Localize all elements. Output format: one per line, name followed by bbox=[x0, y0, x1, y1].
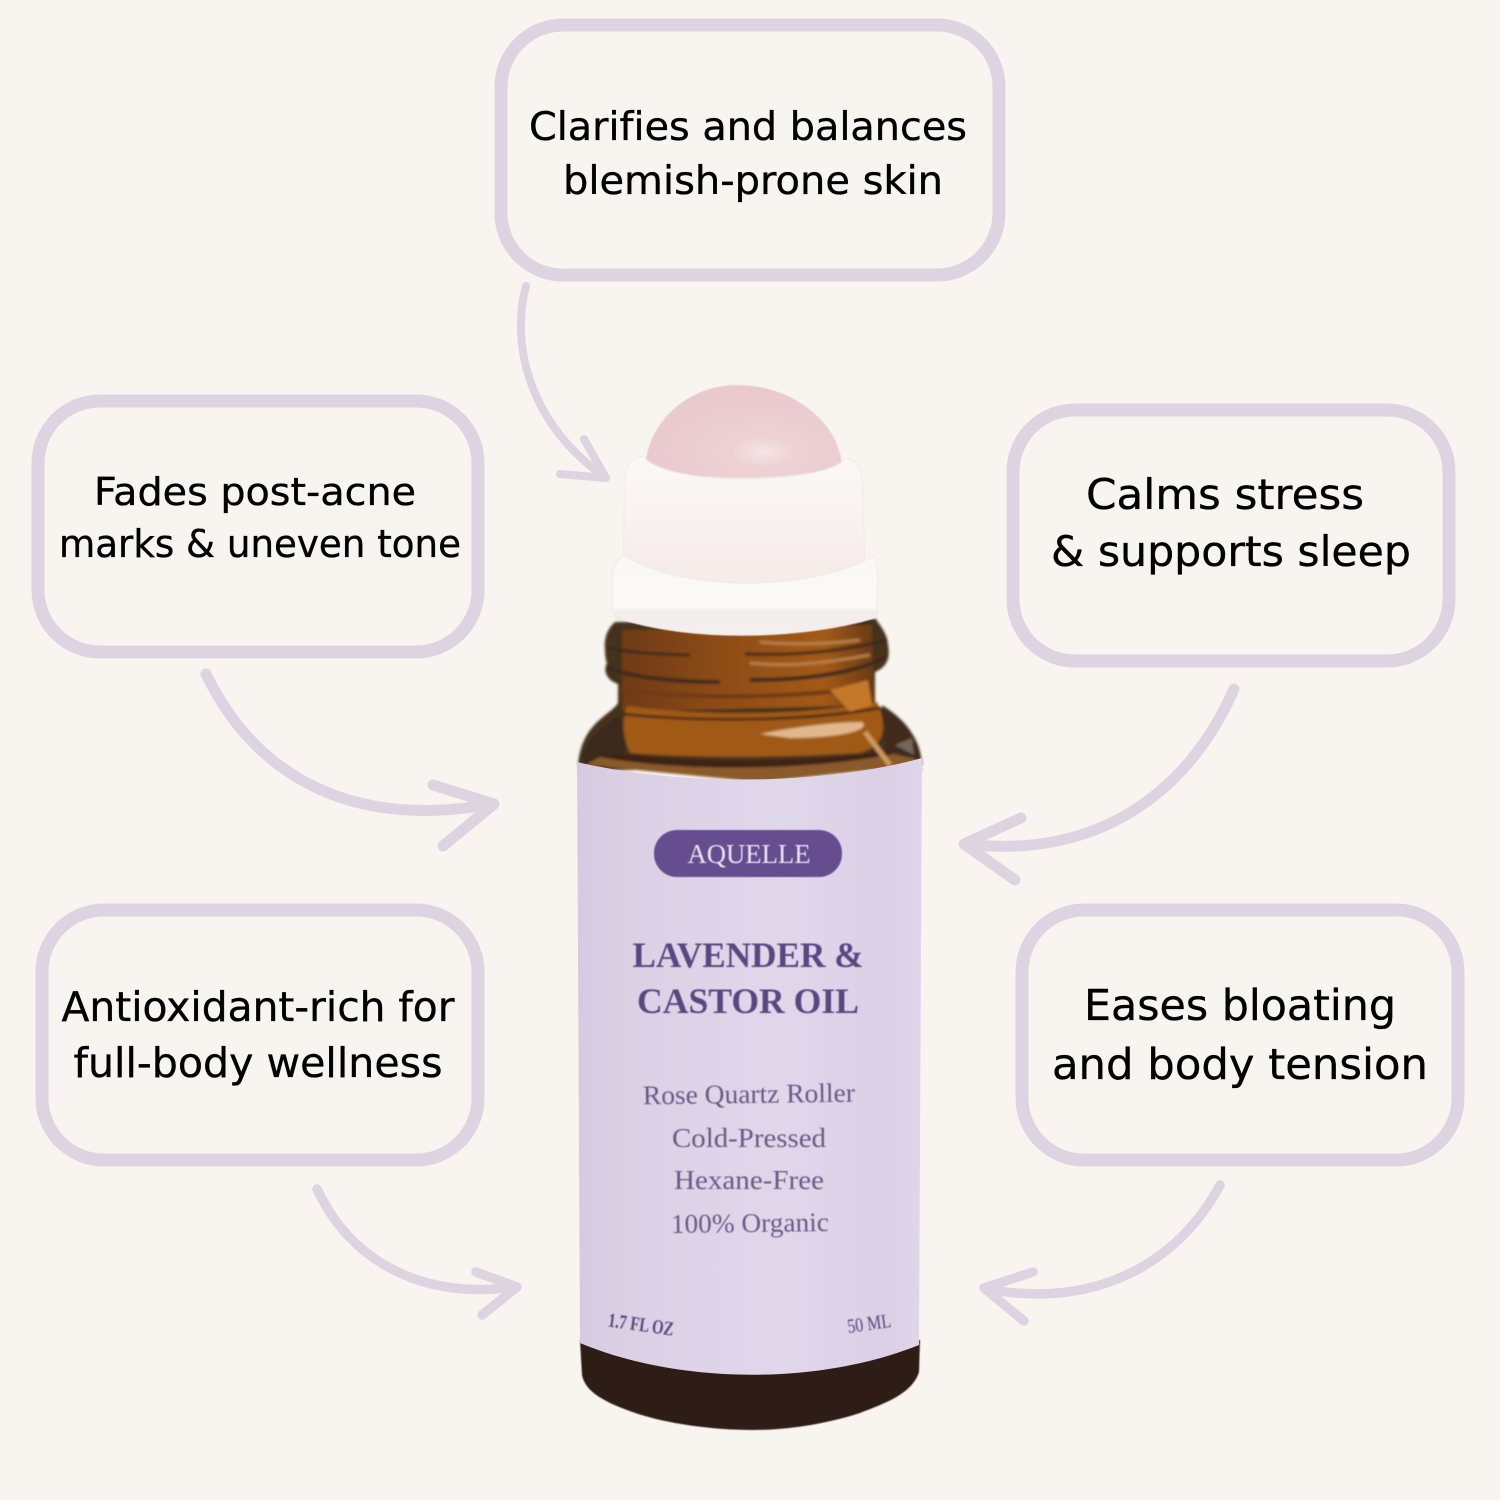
roller ring bbox=[612, 555, 878, 635]
glass neck and shoulders bbox=[578, 618, 922, 782]
label features: Cold-Pressed bbox=[672, 1123, 827, 1153]
callout: clarifies bbox=[501, 25, 999, 275]
brand badge: AQUELLE bbox=[688, 839, 810, 869]
brand badge bbox=[654, 830, 842, 877]
callout: eases: Eases bloating bbox=[1084, 981, 1396, 1031]
callout: calms bbox=[1013, 410, 1449, 661]
volume labels: 1.7 FL OZ bbox=[607, 1310, 675, 1341]
bottle base bbox=[580, 1340, 920, 1430]
label features: Hexane-Free bbox=[674, 1165, 824, 1195]
volume labels bbox=[607, 1310, 892, 1341]
callout: calms: Calms stress bbox=[1086, 470, 1364, 519]
callout: fades: Fades post-acne bbox=[94, 470, 416, 514]
arrow: lower left bbox=[317, 1189, 517, 1315]
label features: 100% Organic bbox=[671, 1207, 829, 1239]
arrow: lower right bbox=[984, 1185, 1220, 1321]
arrow: top bbox=[521, 286, 606, 478]
callout: antioxidant: Antioxidant-rich for bbox=[62, 983, 455, 1031]
arrow: upper left bbox=[206, 674, 494, 846]
callout: antioxidant: full-body wellness bbox=[74, 1039, 443, 1087]
label title: CASTOR OIL bbox=[637, 981, 859, 1021]
callout: antioxidant bbox=[42, 910, 478, 1160]
volume labels: 50 ML bbox=[846, 1310, 892, 1338]
label title bbox=[632, 935, 864, 1021]
arrows bbox=[206, 286, 1234, 1321]
callout: eases: and body tension bbox=[1052, 1040, 1428, 1090]
label bbox=[577, 758, 922, 1375]
callout: eases bbox=[1022, 910, 1458, 1160]
roller cap bbox=[623, 456, 865, 584]
label title: LAVENDER & bbox=[632, 935, 864, 975]
label features: Rose Quartz Roller bbox=[643, 1078, 855, 1110]
label features bbox=[643, 1078, 855, 1239]
arrow: upper right bbox=[964, 689, 1234, 880]
callout: clarifies: blemish-prone skin bbox=[563, 159, 943, 204]
roller ball bbox=[645, 385, 842, 478]
callout: fades bbox=[38, 401, 478, 652]
callout: fades: marks & uneven tone bbox=[59, 522, 461, 566]
callout: calms: & supports sleep bbox=[1051, 527, 1411, 576]
callout: clarifies: Clarifies and balances bbox=[529, 105, 967, 150]
product bottle bbox=[577, 385, 922, 1430]
